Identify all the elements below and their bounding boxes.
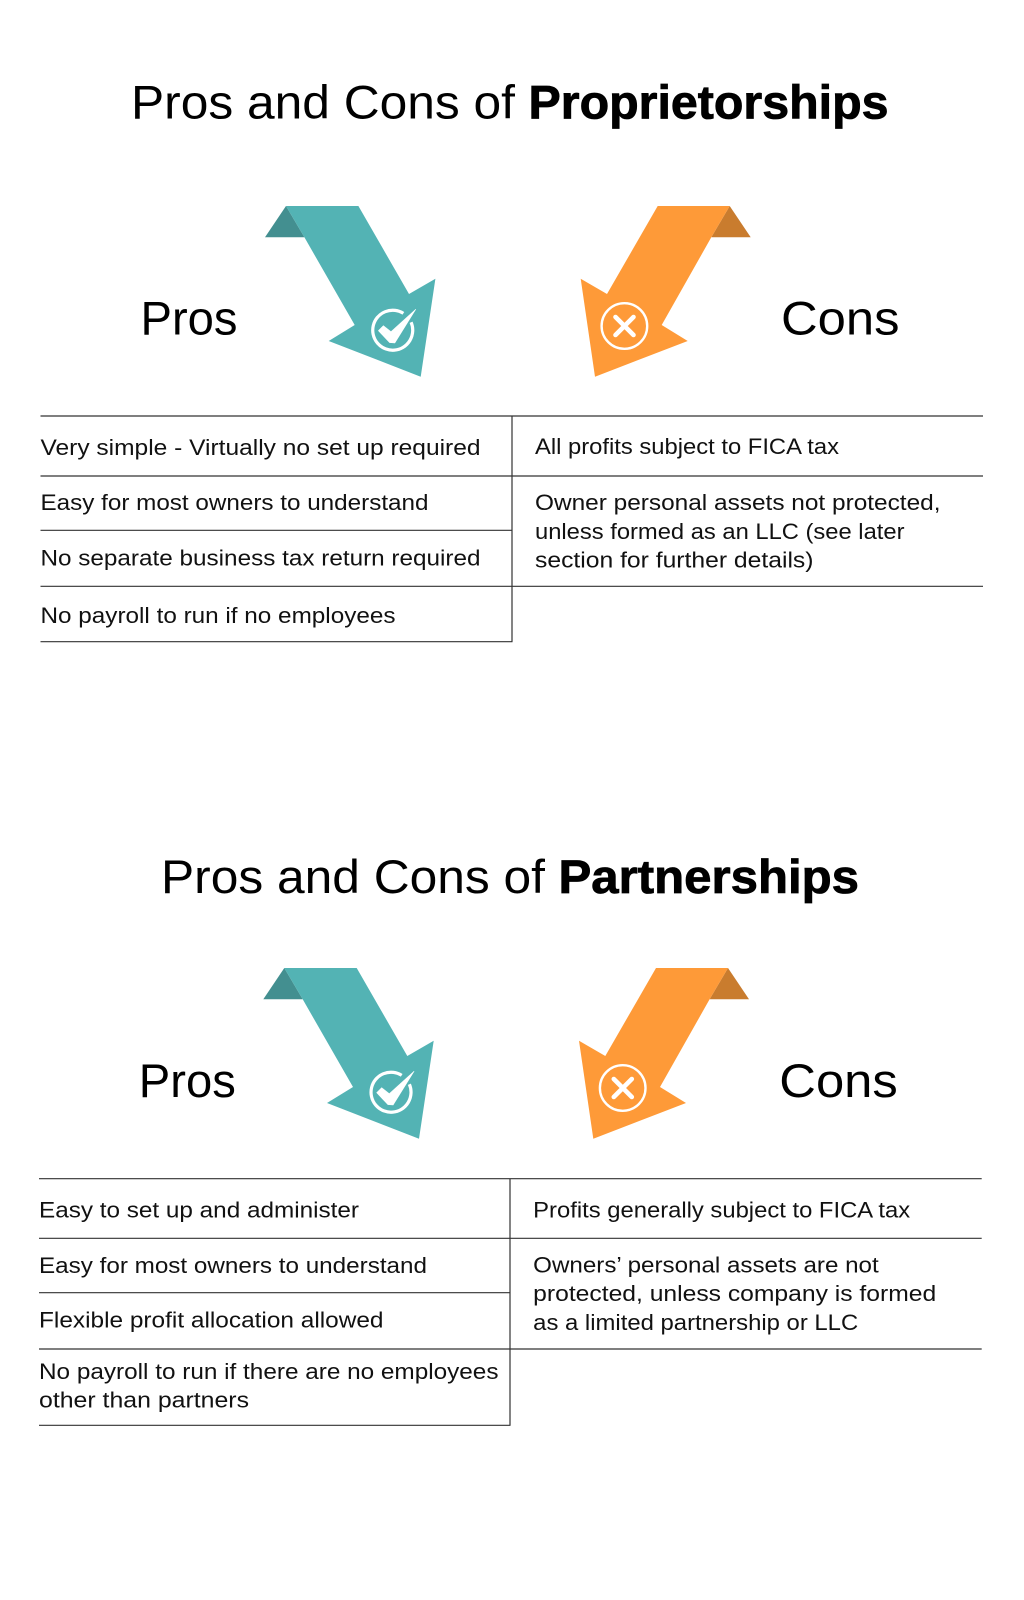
title: partnerships (161, 850, 859, 903)
panel: partnerships (39, 850, 982, 1425)
icon: orange cons arrow with cross (579, 968, 749, 1139)
label: pros: Pros (139, 1054, 236, 1107)
pros list: No payroll to run if there are no employees (39, 1359, 498, 1384)
title: partnerships: Pros and Cons of (161, 850, 546, 903)
pros list: Flexible profit allocation allowed (39, 1308, 384, 1332)
panel: proprietorships (40, 76, 983, 642)
pros list (40, 435, 481, 628)
cons list: Profits generally subject to FICA tax (533, 1198, 911, 1222)
label: cons: Cons (781, 292, 900, 344)
title: proprietorships: Proprietorships (528, 76, 888, 128)
icon: teal pros arrow with check (265, 206, 435, 377)
icon: teal pros arrow with check (263, 968, 434, 1139)
pros list: Easy for most owners to understand (39, 1253, 427, 1278)
table: proprietorship pros and cons (40, 416, 983, 642)
pros list: Easy for most owners to understand (40, 490, 428, 515)
table: partnership pros and cons (39, 1179, 982, 1425)
label: cons: Cons (779, 1054, 898, 1107)
icon: orange cons arrow with cross (581, 206, 751, 377)
cons list: protected, unless company is formed (533, 1281, 936, 1306)
title: proprietorships: Pros and Cons of (131, 76, 516, 128)
label: pros: Pros (140, 292, 238, 344)
title: partnerships: Partnerships (558, 850, 859, 903)
pros list (39, 1198, 498, 1412)
cons list: unless formed as an LLC (see later (535, 519, 905, 544)
cons list: Owner personal assets not protected, (535, 490, 940, 515)
pros list: No payroll to run if no employees (40, 603, 395, 628)
cons list: section for further details) (535, 548, 814, 572)
pros list: No separate business tax return required (40, 546, 481, 570)
pros list: other than partners (39, 1388, 249, 1412)
cons list: Owners’ personal assets are not (533, 1252, 879, 1278)
cons list (535, 434, 940, 572)
title: proprietorships (131, 76, 888, 128)
cons list (533, 1198, 936, 1335)
cons list: as a limited partnership or LLC (533, 1310, 858, 1335)
pros list: Easy to set up and administer (39, 1198, 360, 1222)
pros list: Very simple - Virtually no set up required (40, 435, 480, 460)
cons list: All profits subject to FICA tax (535, 434, 840, 459)
